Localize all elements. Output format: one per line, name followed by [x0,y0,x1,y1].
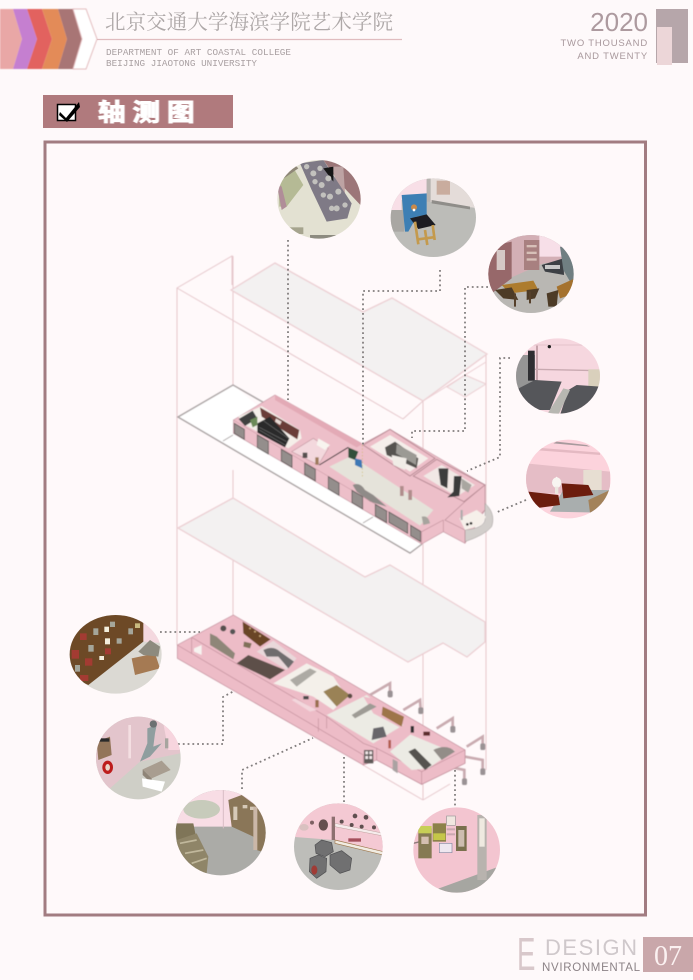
room white display [273,663,352,712]
circle vignette: tables and shelves [488,235,574,313]
room gallery one [327,695,404,743]
circle vignette: lecture hall seats [516,338,600,414]
footer: environmental design mark: NVIRONMENTAL [542,962,641,974]
header: college name: 北京交通大学海滨学院艺术学院 [105,11,393,34]
mid floor slab [178,385,422,553]
axonometric drawing [177,256,493,800]
year block: 2020 [590,7,648,37]
section heading: axonometric: 轴测图 [98,99,201,126]
footer: page number: 07 [654,941,682,972]
entry lobby [445,485,485,530]
front wall inner lines [177,637,377,765]
rear room two [413,459,485,502]
circle vignette: lounge with sofa [526,440,611,518]
circle vignette: wall of shelves [70,615,162,694]
front wall line [233,420,422,544]
room gallery two [388,723,457,770]
dotted leader lines [160,240,526,806]
header: english lines: DEPARTMENT OF ART COASTAL COLLEGE [106,47,291,58]
circle vignette: exhibit figure [96,716,181,800]
year block: TWO THOUSAND [560,38,648,49]
circle vignette: shelves and sacks [176,790,266,876]
circle vignette: seating from above [277,160,361,239]
header: english lines [106,47,291,69]
structural pipes [370,683,483,782]
circle vignette: wall panels [413,807,500,893]
main frame [45,142,646,915]
circle vignette: blue board and table [390,178,476,257]
long corridor floor [329,457,433,526]
icon: checkbox [58,102,80,122]
front windows [234,423,421,542]
corridor furniture [353,484,387,507]
icon: year block squares [656,9,688,65]
footer: page number [643,937,693,972]
section heading: axonometric [43,95,233,128]
header: divider line [97,38,402,40]
year block: AND TWENTY [577,51,648,62]
small service rooms [292,438,328,465]
end windows [364,750,373,763]
upper floor building [233,395,493,544]
footer: environmental design mark: DESIGN [545,935,637,960]
header: chevron banner [0,9,97,69]
letter E: E [517,930,535,980]
footer: environmental design mark [517,930,641,980]
header: english lines: BEIJING JIAOTONG UNIVERSITY [106,58,257,69]
room wood floor [237,641,297,679]
audience room [238,406,302,448]
year block [560,7,688,65]
roof plate [231,263,487,401]
entry window [194,645,202,655]
rear room one [363,429,435,476]
wireframe volume [177,256,486,800]
circle vignette: stones and pink shelves [294,803,383,890]
room sculpture [210,622,271,659]
ground floor building [177,615,485,785]
mid plate [178,498,485,662]
